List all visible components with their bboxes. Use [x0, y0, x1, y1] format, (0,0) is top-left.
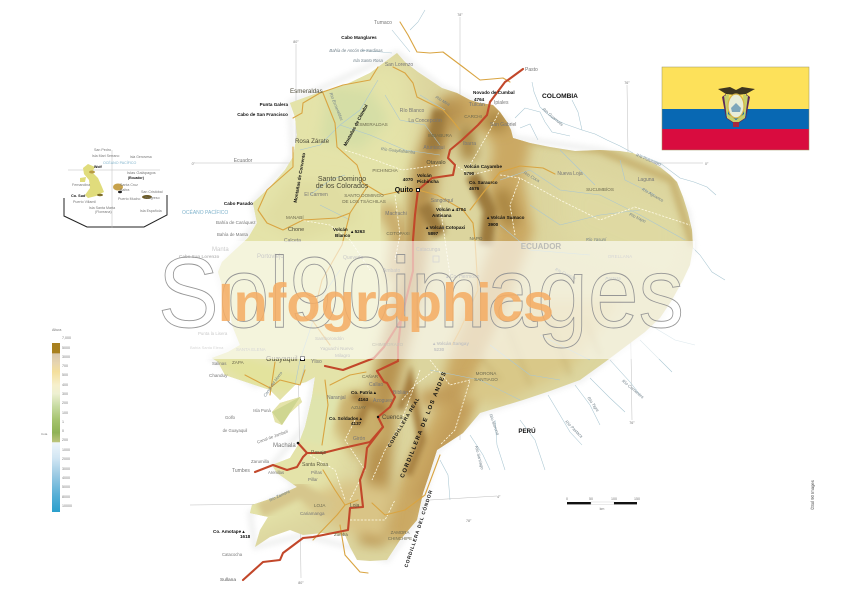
map labels north: Río Blanco: [400, 108, 424, 114]
map labels south: 4137: [351, 421, 362, 426]
map labels north: ESMERALDAS: [356, 122, 388, 127]
map labels north: Bahía de Manta: [217, 232, 249, 237]
map labels north: Calceta: [284, 238, 301, 244]
map labels south: Río Pastaza: [564, 419, 584, 439]
map labels north: Isla Santo Rosa: [353, 58, 383, 63]
island labels: San Pedro: [94, 148, 111, 152]
map labels south: ZAPA: [232, 360, 245, 365]
map labels north: Río Coca: [523, 170, 541, 184]
map labels south: CAÑAR: [362, 373, 379, 379]
graticule: 78°: [466, 519, 472, 523]
map labels south: Naranjal: [327, 395, 346, 401]
island labels: [71, 148, 163, 214]
map labels north: Sangolquí: [431, 198, 454, 204]
island labels: Baltra: [120, 188, 129, 192]
map labels north: Ipiales: [494, 100, 509, 106]
map labels north: Santo Domingo: [318, 176, 366, 183]
map labels north: Chone: [288, 227, 304, 233]
legend: altitude and depth scale: [41, 328, 72, 512]
legend: altitude and depth scale: 700: [62, 364, 68, 368]
legend: altitude and depth scale: Altura: [52, 328, 61, 332]
graticule: 76°: [624, 81, 630, 85]
island shapes: [80, 164, 152, 199]
legend: altitude and depth scale: 400: [62, 383, 68, 387]
map labels north: Río Mira: [435, 95, 451, 107]
legend: altitude and depth scale: 300: [62, 392, 68, 396]
legend: altitude and depth scale: 8000: [62, 495, 70, 499]
map labels south: PERÚ: [518, 428, 536, 435]
scale bar: 50: [589, 497, 593, 501]
map labels south: Co. Amotape ▴: [213, 529, 245, 534]
map labels south: LOJA: [314, 503, 326, 508]
island labels: Puerto Villamil: [73, 200, 96, 204]
map labels south: CHIMBORAZO: [372, 342, 404, 347]
map labels south: Milagro: [335, 353, 351, 358]
legend: altitude and depth scale: 7,000: [62, 336, 71, 340]
legend: altitude and depth scale: 100: [62, 411, 68, 415]
graticule: 80°: [298, 581, 304, 585]
legend: altitude and depth scale: 1000: [62, 448, 70, 452]
map labels north: Cabo Manglares: [341, 35, 377, 40]
map labels north: 5897: [428, 231, 439, 236]
map labels north: Quito: [395, 187, 413, 194]
map labels north: [182, 20, 665, 251]
legend: altitude and depth scale: 5000: [62, 485, 70, 489]
map labels south: Salinas: [212, 361, 227, 366]
map labels north: Rosa Zárate: [295, 138, 330, 145]
legend: altitude and depth scale: 3000: [62, 467, 70, 471]
map labels south: Machala: [273, 443, 296, 449]
island labels: Isla Española: [140, 209, 162, 213]
map labels north: Volcán: [417, 173, 432, 178]
map labels north: 3900: [488, 222, 499, 227]
scale bar: km: [600, 507, 604, 511]
main highway: [243, 69, 523, 580]
map labels south: Loja: [350, 503, 360, 509]
map labels south: 1618: [240, 534, 251, 539]
island labels: Progreso: [145, 196, 160, 200]
graticule: 78°: [457, 13, 463, 17]
map labels south: Río Zamora: [268, 488, 291, 503]
map labels north: Pasto: [525, 67, 538, 73]
map labels north: Novado de Cumbal: [473, 90, 515, 95]
scale bar: 150: [634, 497, 640, 501]
island labels: Isla Santa Marta: [89, 206, 115, 210]
island labels: Fernandina: [72, 183, 90, 187]
map labels south: de Guayaquil: [223, 428, 247, 433]
map labels south: Cabo San Lorenzo: [179, 254, 220, 259]
map labels north: Pichincha: [417, 179, 439, 184]
legend: altitude and depth scale: 5000: [62, 346, 70, 350]
graticule: 76°: [629, 421, 635, 425]
map labels north: Laguna: [638, 177, 655, 183]
map labels south: Zumba: [334, 532, 348, 537]
map labels south: Punta la Lisera: [198, 331, 228, 336]
map labels north: 4676: [469, 186, 480, 191]
map labels north: Co. Saraurco: [469, 180, 498, 185]
map labels north: CARCHI: [464, 114, 482, 119]
map labels north: Blanco: [335, 233, 351, 238]
map labels south: Santa Rosa: [302, 462, 328, 468]
map labels north: SANTO DOMINGO: [344, 193, 384, 198]
map labels north: de los Colorados: [316, 183, 369, 190]
legend: altitude and depth scale: 1: [62, 420, 64, 424]
map labels north: Esmeraldas: [290, 88, 323, 95]
provincial borders: [300, 110, 690, 520]
map labels north: NAPO: [469, 236, 483, 241]
roads secondary: [245, 22, 555, 573]
map labels south: Azogues: [373, 398, 393, 404]
map labels north: Cabo de San Francisco: [237, 112, 288, 117]
map labels north: Río Guamués: [541, 107, 565, 128]
map labels south: Pastaza: [605, 276, 621, 281]
map labels south: Zarumilla: [251, 459, 270, 464]
graticule: 4°: [497, 495, 501, 499]
map labels south: Piñas: [311, 470, 323, 475]
map labels north: IMBABURA: [428, 133, 453, 138]
island labels: San Cristóbal: [141, 190, 163, 194]
island labels: (Floreana): [95, 210, 112, 214]
map labels north: Río Napo: [629, 212, 647, 224]
Ecuador relief map: [179, 20, 710, 583]
map labels south: Río Morona: [488, 413, 501, 436]
map labels north: Tulcán: [469, 102, 485, 108]
map labels south: 4163: [358, 397, 369, 402]
map labels north: ▴ Volcán Cotopaxi: [425, 225, 465, 230]
internal rivers: [270, 80, 685, 408]
map labels south: Catacocha: [222, 552, 243, 557]
map labels north: Cabo Pasado: [224, 201, 253, 206]
map labels south: ZAMORA: [391, 530, 409, 535]
island labels: OCÉANO PACÍFICO: [103, 160, 136, 165]
map labels south: Arenillas: [268, 470, 284, 475]
legend: altitude and depth scale: 2000: [62, 457, 70, 461]
map labels north: PICHINCHA: [372, 168, 399, 173]
map labels north: Volcán ▴ 4704: [436, 207, 466, 212]
map labels south: CORDILLERA DE LOS ANDES: [400, 370, 448, 479]
map labels south: Pillar: [308, 477, 318, 482]
map labels north: ▴ Volcán Sumaco: [486, 215, 525, 220]
map labels north: Bahía de Caráquez: [216, 220, 256, 225]
map labels south: Co. Patria ▴: [351, 390, 377, 395]
map labels north: Bahía de Ancón de Sardinas: [329, 48, 383, 53]
neighbouring rivers: [360, 10, 725, 500]
map labels north: Montañas de Convento: [293, 152, 306, 203]
map labels south: Cuenca: [382, 415, 403, 421]
map labels south: Callao: [369, 382, 383, 388]
legend: altitude and depth scale: 200: [62, 401, 68, 405]
graticule: 0°: [192, 162, 196, 166]
map labels south: Biblián: [393, 390, 408, 396]
map labels south: Guayaquil: [266, 356, 298, 363]
map labels south: Bahía Santa Elena: [190, 345, 224, 350]
map labels south: ▴ Volcán Sangay: [432, 341, 469, 346]
legend: altitude and depth scale: 500: [62, 373, 68, 377]
legend: altitude and depth scale: Cota: [41, 432, 48, 436]
island labels: Isla Mari Serrano: [92, 154, 119, 158]
island labels: Wolf: [94, 165, 103, 169]
map labels north: 5790: [464, 171, 475, 176]
map labels south: ORELLANA: [608, 254, 633, 259]
island labels: (Ecuador): [128, 176, 144, 180]
map labels south: Golfo: [225, 415, 236, 420]
legend: altitude and depth scale: 200: [62, 438, 68, 442]
map labels north: El Carmen: [304, 192, 328, 198]
scale bar: [566, 497, 640, 511]
island labels: Puerto Mucho: [118, 197, 140, 201]
legend: altitude and depth scale: 10000: [62, 504, 72, 508]
map labels south: Canal de Jambelí: [256, 428, 289, 445]
map labels south: [179, 247, 646, 583]
terrain colours: [212, 53, 693, 561]
map labels south: Río Tigre: [586, 396, 601, 413]
map labels north: Atuntaqui: [423, 145, 445, 151]
watermark band: [165, 241, 695, 359]
map labels south: Tumbes: [232, 468, 250, 474]
map labels south: Catacunga: [416, 247, 440, 253]
credit: ©Sol 90 Images: [810, 480, 815, 510]
map labels south: SANTIAGO: [474, 377, 498, 382]
map labels south: 5230: [434, 347, 445, 352]
map labels south: AZUAY: [351, 405, 366, 410]
graticule: [190, 13, 709, 585]
graticule: 0°: [705, 162, 709, 166]
map labels north: 4764: [474, 97, 485, 102]
map labels north: MANABÍ: [286, 214, 304, 220]
map labels south: Río Curaray: [554, 267, 578, 281]
map labels north: Punta Galera: [260, 102, 288, 107]
map labels south: Río Corrientes: [621, 378, 646, 400]
map labels south: Co. Soldados ▴: [329, 416, 363, 421]
map labels south: CHINCHIPE: [388, 536, 412, 541]
map labels south: Portoviejo: [257, 254, 284, 260]
map labels north: ▴ 5263: [350, 229, 365, 234]
map labels south: Sullana: [220, 577, 236, 583]
map labels north: Río Aguarico: [641, 187, 665, 203]
legend: altitude and depth scale: 4000: [62, 476, 70, 480]
map labels north: Volcán: [333, 227, 348, 232]
map labels north: Machachi: [385, 211, 407, 217]
scale bar: 100: [611, 497, 617, 501]
map labels south: Pasaje: [311, 450, 327, 456]
inset frame: [64, 195, 167, 227]
map labels north: 4070: [403, 177, 413, 182]
map labels south: Quevedo: [343, 255, 364, 261]
scale bar: 0: [566, 497, 568, 501]
map labels south: Isla Puná: [253, 408, 271, 413]
map labels north: Río Guayllabamba: [381, 146, 416, 155]
map labels north: DE LOS TSÁCHILAS: [342, 198, 386, 204]
map labels south: Río Santiago: [474, 445, 485, 471]
map labels south: ▴ Co. Hermoso: [446, 274, 480, 280]
watermark: Infographics: Infographics: [218, 273, 554, 333]
map labels north: ECUADOR: [521, 242, 561, 251]
map labels north: SUCUMBÍOS: [586, 186, 614, 192]
map labels south: Yaguachi Nuevo: [320, 346, 354, 351]
inset: Galápagos islands: [64, 148, 167, 228]
island labels: Santa Cruz: [120, 183, 138, 187]
map labels north: Río Esmeraldas: [328, 92, 345, 122]
map labels north: OCÉANO PACÍFICO: [182, 209, 228, 216]
map labels north: Tumaco: [374, 20, 392, 26]
legend: altitude and depth scale: 3000: [62, 355, 70, 359]
coastal shadow: [212, 53, 693, 560]
map labels south: Samborondón: [315, 336, 344, 341]
map labels north: COTOPAXI: [386, 231, 410, 236]
map labels north: La Concepción: [408, 118, 442, 124]
watermark: Sol90images: Sol90images: [158, 237, 684, 349]
graticule: Ecuador: [234, 158, 253, 164]
island labels: Islas Galápagos: [127, 170, 156, 175]
map labels south: Canal del Morro: [262, 370, 284, 398]
map labels south: SANTA ELENA: [236, 347, 266, 352]
map labels north: San Gabriel: [490, 122, 516, 128]
map labels south: MORONA: [476, 371, 497, 376]
graticule: 80°: [293, 40, 299, 44]
map labels south: CORDILLERA REAL: [387, 396, 422, 449]
map labels south: Yliso: [311, 359, 322, 365]
map labels north: Volcán Cayambe: [464, 164, 502, 170]
map labels north: Montañas de Chindul: [343, 104, 369, 147]
map labels south: Girón: [353, 436, 365, 442]
flag of Ecuador: [662, 67, 809, 150]
island labels: Co. Sud: [71, 194, 86, 198]
map labels south: Ambato: [383, 268, 400, 274]
map labels north: Río Yasuní: [586, 237, 607, 242]
map labels north: Río Putumayo: [635, 152, 662, 167]
map labels south: CORDILLERA DEL CÓNDOR: [402, 488, 435, 568]
map labels north: Ibarra: [463, 141, 476, 147]
map labels south: Chanduy: [209, 373, 228, 378]
icon: coat of arms: [718, 87, 755, 127]
map labels south: Cariamanga: [300, 511, 325, 516]
legend: altitude and depth scale: 0: [62, 429, 64, 433]
map labels north: San Lorenzo: [385, 62, 413, 68]
map labels north: Nueva Loja: [557, 171, 583, 177]
map labels north: Otavalo: [426, 160, 446, 166]
map labels north: Antisana: [432, 213, 452, 218]
island labels: Isla Genovesa: [130, 155, 152, 159]
map labels north: COLOMBIA: [542, 93, 578, 100]
map labels south: Manta: [212, 247, 229, 253]
